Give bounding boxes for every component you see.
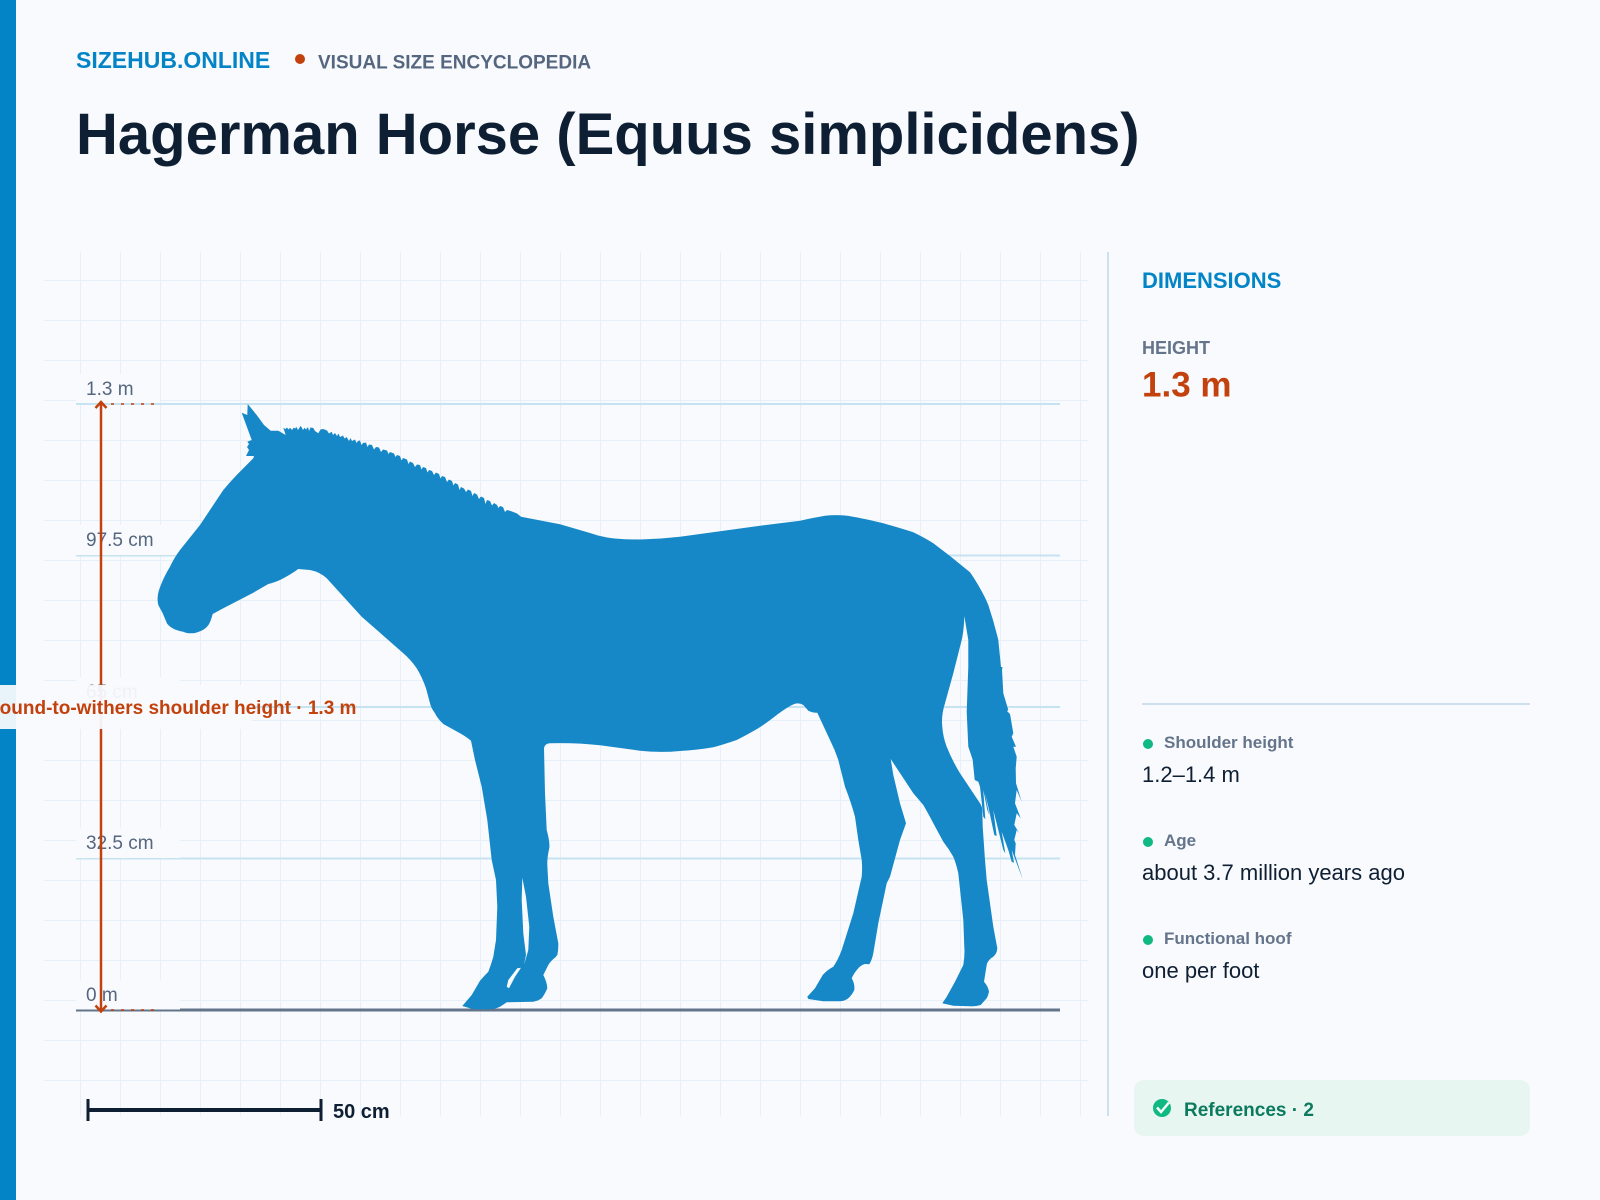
fact: age: about 3.7 million years ago	[1142, 860, 1405, 885]
fact: shoulder height: 1.2–1.4 m	[1142, 762, 1240, 787]
axis labels: 32.5 cm	[86, 833, 154, 854]
axis labels: 1.3 m	[86, 379, 134, 400]
horse silhouette	[158, 404, 1023, 1009]
fact: functional hoof	[1142, 929, 1292, 983]
brand name: SIZEHUB.ONLINE	[76, 47, 270, 73]
title: Hagerman Horse (Equus simplicidens)	[76, 102, 1140, 167]
panel divider	[1107, 252, 1109, 1116]
icon: check	[1153, 1099, 1171, 1117]
scale bar	[88, 1099, 390, 1123]
fact: shoulder height: Shoulder height	[1164, 733, 1294, 752]
fact: shoulder height	[1142, 733, 1294, 787]
height reference lines	[76, 404, 1060, 858]
height label: HEIGHT	[1142, 338, 1210, 358]
scale bar: 50 cm	[333, 1101, 390, 1123]
tagline: VISUAL SIZE ENCYCLOPEDIA	[318, 52, 591, 74]
fact: age: Age	[1164, 831, 1196, 850]
dotted height ticks	[111, 404, 156, 1010]
axis labels: 97.5 cm	[86, 530, 154, 551]
callout	[0, 685, 356, 729]
axis labels	[76, 374, 180, 1010]
left accent bar	[0, 0, 16, 1200]
axis labels: 65 cm	[86, 682, 138, 703]
ground line	[76, 1008, 1060, 1012]
header dot	[295, 54, 305, 64]
fact: age	[1142, 831, 1405, 885]
references box	[1134, 1080, 1530, 1136]
height value: 1.3 m	[1142, 366, 1232, 404]
fact: functional hoof: one per foot	[1142, 958, 1259, 983]
panel: dimensions	[1142, 268, 1530, 983]
fact: functional hoof: Functional hoof	[1164, 929, 1292, 948]
height arrow	[96, 402, 106, 1012]
axis labels: 0 m	[86, 985, 118, 1006]
references box: References · 2	[1184, 1100, 1314, 1121]
header	[76, 47, 591, 74]
panel heading: DIMENSIONS	[1142, 268, 1281, 293]
